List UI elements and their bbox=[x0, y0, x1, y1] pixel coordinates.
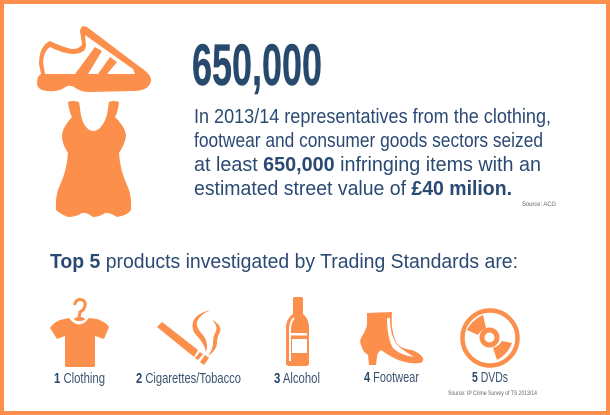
label: alcohol: 3 Alcohol bbox=[274, 371, 320, 387]
icon: dress bbox=[56, 101, 131, 217]
label: dvds: 5 DVDs bbox=[472, 370, 508, 386]
icon: running shoe bbox=[37, 26, 151, 92]
icon: cigarette with smoke bbox=[157, 310, 220, 365]
label: footwear: 4 Footwear bbox=[364, 370, 419, 386]
icon: t-shirt on hanger bbox=[50, 300, 109, 367]
body text: estimated street value of £40 milion. bbox=[194, 178, 512, 200]
icon: ankle boot bbox=[360, 312, 423, 365]
source note: IP Crime Survey: Source: IP Crime Survey of TS 2013/14 bbox=[448, 391, 538, 397]
big number: 650,000 bbox=[192, 33, 322, 98]
body text bbox=[194, 106, 551, 200]
icon: bottle bbox=[286, 297, 309, 366]
label: cigarettes: 2 Cigarettes/Tobacco bbox=[136, 371, 241, 387]
label: clothing: 1 Clothing bbox=[54, 371, 105, 387]
body text: In 2013/14 representatives from the clothing, bbox=[194, 106, 551, 128]
body text: at least 650,000 infringing items with an bbox=[194, 154, 541, 176]
section heading: Top 5 products investigated by Trading Standards are: bbox=[50, 251, 518, 273]
icon: dvd disc bbox=[462, 310, 518, 366]
source note: ACG: Source: ACG bbox=[522, 201, 556, 208]
body text: footwear and consumer goods sectors seized bbox=[194, 130, 543, 152]
